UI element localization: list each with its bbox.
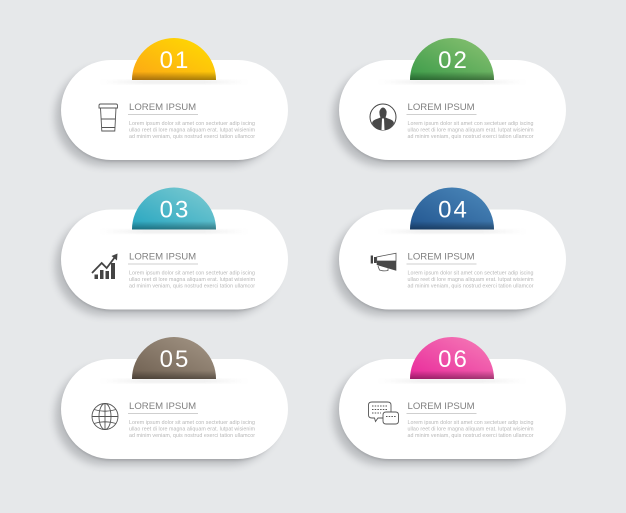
icon: businessman	[370, 104, 396, 130]
body text: ullao reet di lore magna aliquam erat. lutpat wisienim	[129, 427, 256, 433]
body text	[408, 121, 534, 140]
body text: ad minim veniam, quis nostrud exerci tation ullamcor	[408, 433, 534, 439]
icon: megaphone	[371, 253, 396, 271]
panel: step 01	[55, 38, 288, 166]
icon: coffee cup	[99, 104, 118, 131]
card	[339, 60, 566, 160]
body text: ad minim veniam, quis nostrud exerci tation ullamcor	[408, 284, 534, 290]
heading: LOREM IPSUM	[129, 252, 196, 262]
panel: step 02	[333, 38, 566, 166]
number: 01	[160, 47, 190, 74]
icon: growth chart	[92, 254, 118, 279]
body text: ullao reet di lore magna aliquam erat. lutpat wisienim	[129, 277, 256, 283]
number: 03	[160, 196, 190, 224]
card shadow	[55, 212, 284, 316]
body text: Lorem ipsum dolor sit amet con sectetuer adip iscing	[129, 420, 255, 426]
body text: ullao reet di lore magna aliquam erat. lutpat wisienim	[408, 427, 534, 433]
tab shadow	[378, 230, 526, 234]
icon: globe	[92, 404, 118, 430]
heading: LOREM IPSUM	[129, 102, 196, 113]
divider	[128, 114, 198, 115]
body text	[129, 271, 256, 290]
divider	[128, 413, 198, 414]
body text: ad minim veniam, quis nostrud exerci tation ullamcor	[129, 134, 255, 140]
tab shadow	[100, 80, 248, 84]
number tab	[132, 38, 216, 80]
panel: step 03	[55, 188, 288, 316]
tab shadow	[378, 80, 526, 84]
card shadow	[55, 362, 284, 465]
card shadow	[333, 362, 562, 465]
icon: chat bubbles	[368, 402, 398, 424]
number tab	[410, 337, 494, 379]
number: 06	[438, 346, 469, 373]
number tab	[410, 38, 494, 80]
panel: step 04	[333, 188, 566, 316]
body text: Lorem ipsum dolor sit amet con sectetuer adip iscing	[408, 121, 534, 127]
card	[61, 210, 288, 310]
divider	[406, 114, 476, 115]
body text: Lorem ipsum dolor sit amet con sectetuer adip iscing	[408, 420, 534, 426]
body text: ullao reet di lore magna aliquam erat. lutpat wisienim	[129, 128, 256, 134]
divider	[406, 264, 476, 265]
card shadow	[333, 212, 562, 316]
panel: step 06	[333, 337, 566, 465]
body text: ad minim veniam, quis nostrud exerci tation ullamcor	[129, 284, 255, 290]
card shadow	[333, 63, 562, 166]
card shadow	[55, 63, 284, 166]
body text: ad minim veniam, quis nostrud exerci tation ullamcor	[129, 433, 255, 439]
tab shadow	[100, 230, 248, 234]
card	[339, 359, 566, 459]
body text	[129, 420, 256, 439]
number tab	[410, 188, 494, 230]
tab shadow	[378, 379, 526, 383]
body text	[408, 420, 534, 439]
number: 04	[438, 196, 469, 224]
number tab	[132, 337, 216, 379]
heading: LOREM IPSUM	[129, 401, 196, 412]
body text: ad minim veniam, quis nostrud exerci tation ullamcor	[408, 134, 534, 140]
panel: step 05	[55, 337, 288, 465]
heading: LOREM IPSUM	[408, 102, 475, 113]
body text	[129, 121, 256, 140]
body text	[408, 271, 534, 290]
tab shadow	[100, 379, 248, 383]
card	[61, 60, 288, 160]
number: 02	[438, 47, 469, 74]
body text: Lorem ipsum dolor sit amet con sectetuer adip iscing	[129, 121, 255, 127]
heading: LOREM IPSUM	[408, 252, 475, 262]
card	[61, 359, 288, 459]
card	[339, 210, 566, 310]
divider	[406, 413, 476, 414]
number tab	[132, 188, 216, 230]
body text: Lorem ipsum dolor sit amet con sectetuer adip iscing	[408, 271, 534, 277]
heading: LOREM IPSUM	[408, 401, 475, 412]
divider	[128, 264, 198, 265]
body text: Lorem ipsum dolor sit amet con sectetuer adip iscing	[129, 271, 255, 277]
body text: ullao reet di lore magna aliquam erat. lutpat wisienim	[408, 128, 534, 134]
number: 05	[160, 346, 190, 373]
body text: ullao reet di lore magna aliquam erat. lutpat wisienim	[408, 277, 534, 283]
